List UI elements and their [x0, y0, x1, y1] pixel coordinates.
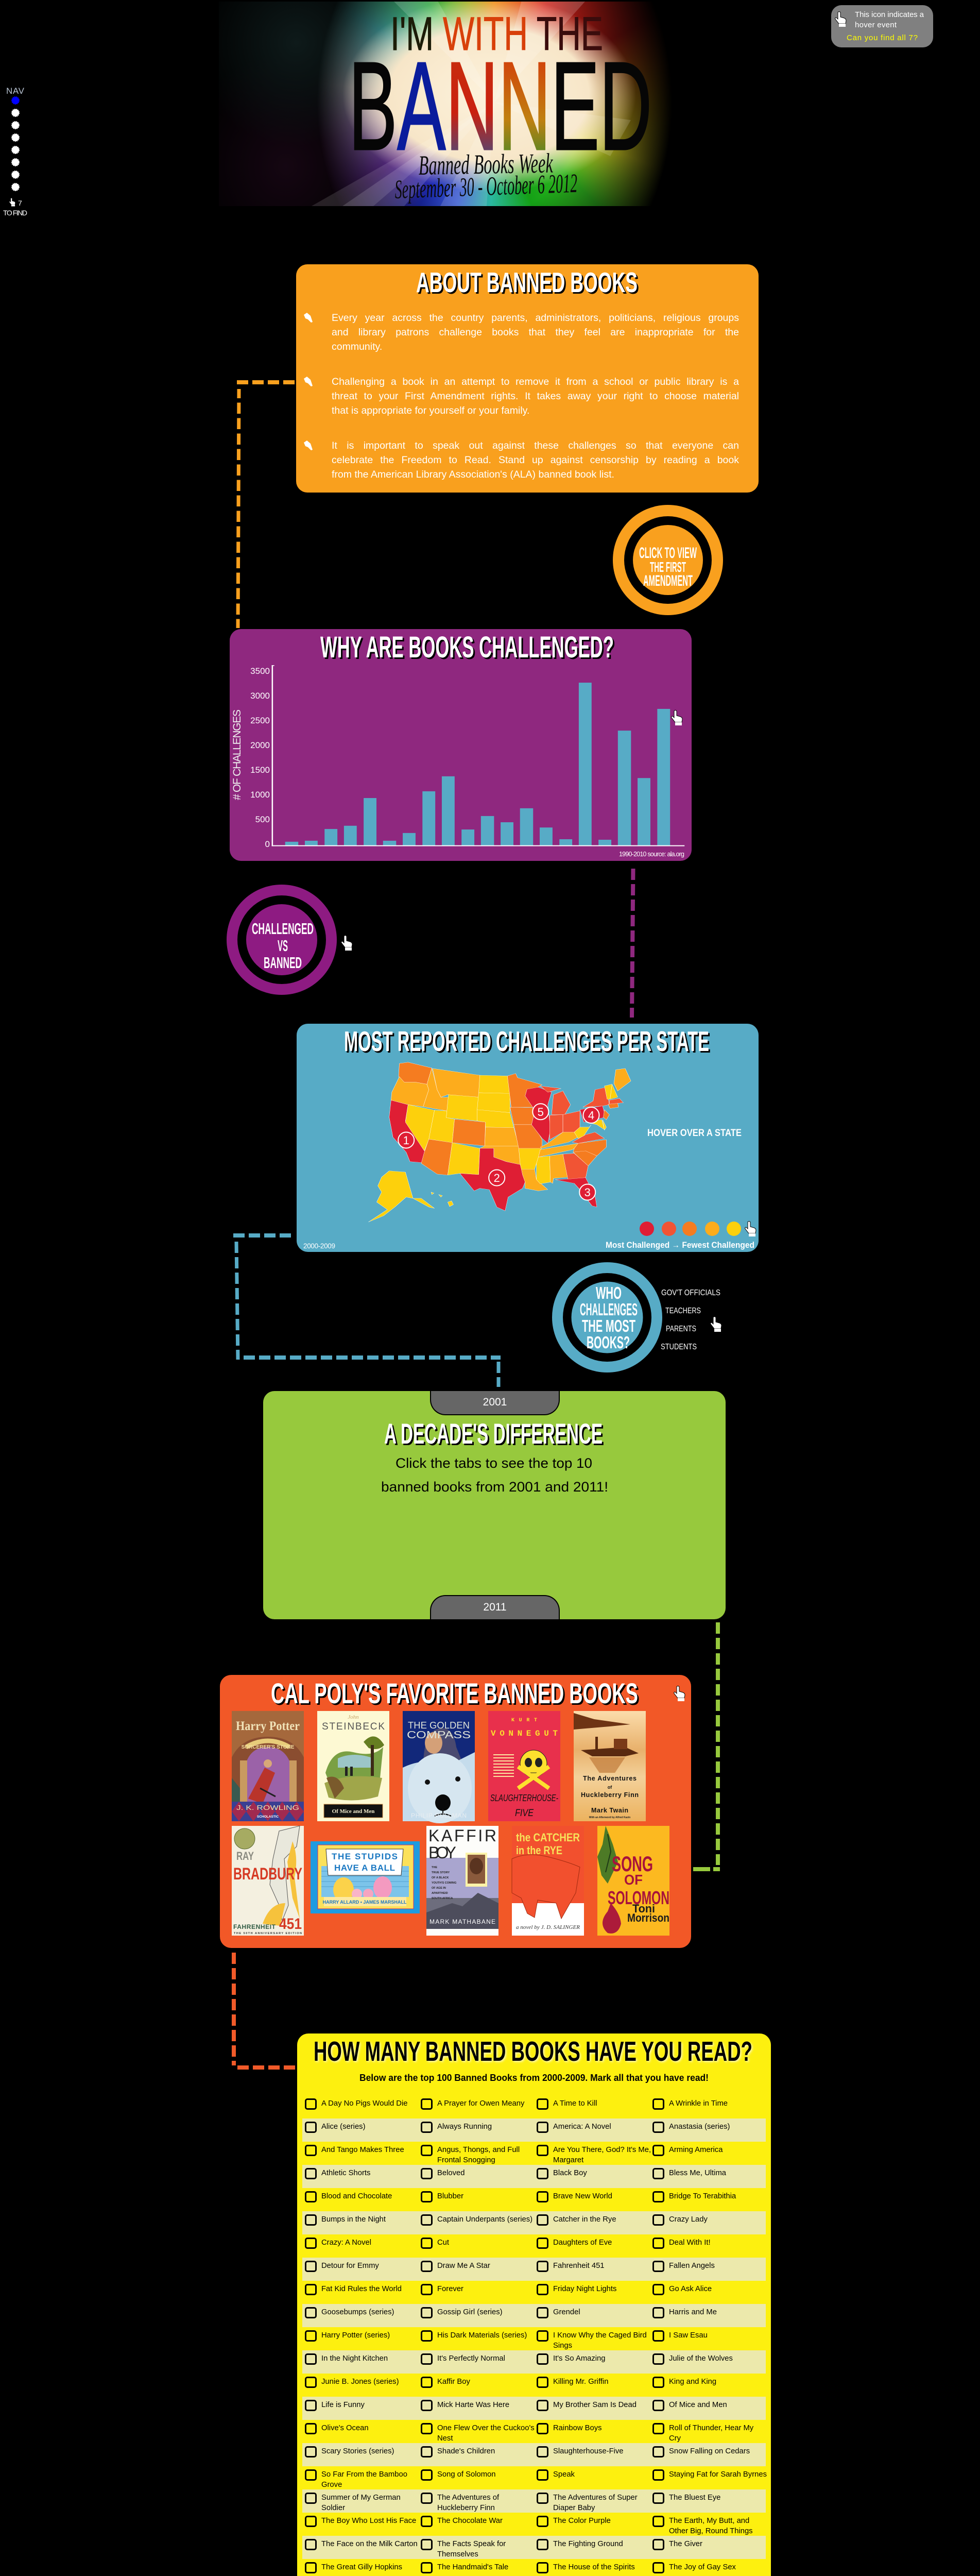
panel: challenges per state [297, 1024, 759, 1252]
connector: about to why [237, 382, 295, 628]
paragraph 1: and library patrons challenge books that they feel are inappropriate for the [332, 327, 739, 338]
checklist table: Nest [437, 2434, 453, 2443]
panel: cal poly's favorite banned books [220, 1675, 691, 1948]
instructions: banned books from 2001 and 2011! [381, 1479, 608, 1495]
book cover: fahrenheit 451: BRADBURY [233, 1865, 302, 1883]
map rank numbers: 2 [494, 1172, 500, 1184]
map rank numbers: 1 [403, 1134, 409, 1147]
connector: states to decade [233, 1235, 501, 1387]
book cover: song of solomon: Toni [632, 1902, 655, 1915]
hover event tooltip: Can you find all 7? [847, 33, 918, 42]
paragraph 1 [332, 312, 739, 352]
heading: HOW MANY BANNED BOOKS HAVE YOU READ? [314, 2036, 752, 2067]
us map [303, 1062, 756, 1250]
side navigation: 7 [18, 199, 22, 207]
paragraph 2: threat to your First Amendment rights. It takes away your right to choose material [332, 391, 739, 402]
book cover: slaughterhouse-five: KURT [511, 1718, 537, 1723]
book cover: kaffir boy: OF AGE IN [432, 1887, 446, 1890]
checklist table: I Know Why the Caged Bird [553, 2331, 647, 2340]
book cover: slaughterhouse-five: SLAUGHTERHOUSE- [490, 1793, 558, 1803]
map rank numbers: 5 [538, 1106, 544, 1118]
checklist table: Margaret [553, 2156, 583, 2164]
checklist table: The Handmaid's Tale [437, 2563, 508, 2571]
book cover: kaffir boy: OF A BLACK [432, 1876, 449, 1879]
y axis labels: 1500 [250, 765, 270, 775]
checklist table: I Saw Esau [669, 2331, 708, 2340]
checklist table: Olive's Ocean [321, 2424, 369, 2432]
checklist table: Shade's Children [437, 2447, 495, 2455]
checklist table: Slaughterhouse-Five [553, 2447, 624, 2455]
checklist table: It's So Amazing [553, 2354, 606, 2363]
y axis labels [250, 666, 270, 849]
checklist table: The Face on the Milk Carton [321, 2540, 418, 2548]
checklist table: My Brother Sam Is Dead [553, 2401, 637, 2409]
hover event tooltip [831, 5, 933, 47]
checklist table: Song of Solomon [437, 2470, 496, 2479]
circle: challenged vs banned: CHALLENGED [252, 920, 314, 938]
checklist table: A Day No Pigs Would Die [321, 2099, 408, 2108]
panel: about banned books [296, 264, 759, 493]
icon: hover count hand [9, 198, 15, 206]
checklist table: Killing Mr. Griffin [553, 2378, 608, 2386]
hero title: Banned Books Week [418, 147, 554, 181]
book cover: huckleberry finn: of [608, 1785, 612, 1790]
bar chart [231, 665, 685, 858]
paragraph 1: Every year across the country parents, administrators, politicians, religious groups [332, 312, 739, 324]
hero title: September 30 - October 6 2012 [394, 169, 578, 205]
book cover: harry potter: SORCERER'S STONE [242, 1744, 295, 1750]
checklist table: Alice (series) [321, 2123, 366, 2131]
checklist table: Themselves [437, 2550, 478, 2558]
side navigation [3, 86, 27, 217]
side navigation: TO FIND [3, 209, 27, 217]
checklist table: Fahrenheit 451 [553, 2262, 605, 2270]
challenger labels: TEACHERS [665, 1307, 701, 1315]
book cover: song of solomon [597, 1826, 669, 1936]
checklist table: Forever [437, 2285, 463, 2293]
panel: a decade's difference [263, 1391, 726, 1619]
connector: favorites to checklist [234, 1953, 295, 2067]
checklist table: Beloved [437, 2169, 465, 2177]
book cover: huckleberry finn: Huckleberry Finn [581, 1791, 639, 1799]
challenger labels: STUDENTS [661, 1343, 697, 1351]
book cover: huckleberry finn: Mark Twain [591, 1807, 628, 1814]
checklist table: Frontal Snogging [437, 2156, 495, 2164]
checklist table: A Wrinkle in Time [669, 2099, 728, 2108]
book cover: harry potter: J. K. ROWLING [236, 1804, 299, 1811]
paragraph 3: celebrate the Freedom to Read. Stand up against censorship by reading a book [332, 454, 739, 466]
checklist table: The Joy of Gay Sex [669, 2563, 736, 2571]
checklist table: Scary Stories (series) [321, 2447, 394, 2455]
checklist table: Arming America [669, 2146, 723, 2154]
y axis labels: 2500 [250, 716, 270, 725]
checklist table: Diaper Baby [553, 2504, 595, 2512]
book cover: kaffir boy: BOY [428, 1843, 456, 1862]
checklist table: Blubber [437, 2192, 463, 2200]
checklist table: Snow Falling on Cedars [669, 2447, 750, 2455]
book cover: kaffir boy [426, 1826, 498, 1936]
paragraph 3: from the American Library Association's (ALA) banned book list. [332, 469, 614, 480]
legend [606, 1222, 754, 1250]
checklist table: Deal With It! [669, 2239, 711, 2247]
book cover: the golden compass: COMPASS [407, 1730, 471, 1741]
book cover: kaffir boy: KAFFIR [428, 1826, 496, 1845]
checklist table: Catcher in the Rye [553, 2215, 616, 2224]
checklist table: Rainbow Boys [553, 2424, 602, 2432]
book cover: song of solomon: SOLOMON [608, 1887, 669, 1908]
checklist table: Crazy Lady [669, 2215, 708, 2224]
checklist table: Kaffir Boy [437, 2378, 470, 2386]
checklist table: Gossip Girl (series) [437, 2308, 503, 2316]
hover prompt: HOVER OVER A STATE [647, 1128, 742, 1139]
hero banner [222, 2, 668, 206]
checklist table: And Tango Makes Three [321, 2146, 404, 2154]
circle: who challenges the most books: THE MOST [582, 1316, 635, 1335]
map rank numbers: 3 [584, 1186, 591, 1199]
paragraph 1: community. [332, 341, 382, 352]
connector: why to states [632, 869, 633, 1018]
heading: A DECADE'S DIFFERENCE [384, 1417, 603, 1450]
circle: challenged vs banned: VS [278, 937, 288, 955]
checklist table: The Color Purple [553, 2517, 611, 2525]
icon: hover hand [341, 936, 352, 951]
book cover: fahrenheit 451: THE 50TH ANNIVERSARY EDITION [234, 1932, 302, 1935]
book cover: the golden compass: THE GOLDEN [408, 1720, 470, 1731]
book cover: kaffir boy: TRUE STORY [432, 1871, 450, 1874]
book cover: of mice and men: John [348, 1714, 359, 1720]
checklist table: Staying Fat for Sarah Byrnes [669, 2470, 767, 2479]
source note: 1990-2010 source: ala.org [619, 851, 684, 858]
map rank markers [398, 1104, 599, 1200]
checklist table: Bridge To Terabithia [669, 2192, 736, 2200]
book cover: fahrenheit 451: 451 [279, 1916, 302, 1933]
checklist table: Are You There, God? It's Me, [553, 2146, 651, 2154]
tab: 2011: 2011 [483, 1601, 507, 1613]
book cover: the golden compass: PHILIP PULLMAN [411, 1812, 467, 1819]
book cover: kaffir boy: THE [432, 1866, 437, 1869]
book cover: catcher in the rye: the CATCHER [516, 1831, 580, 1844]
hover event tooltip: hover event [855, 21, 897, 29]
circle: first amendment: CLICK TO VIEW [639, 545, 697, 562]
book cover: kaffir boy: SOUTH AFRICA [432, 1897, 453, 1900]
heading: WHY ARE BOOKS CHALLENGED? [320, 631, 614, 664]
challenger labels: PARENTS [666, 1325, 696, 1333]
nav dots [12, 97, 19, 191]
book cover: slaughterhouse-five [488, 1711, 560, 1821]
checklist table: Harris and Me [669, 2308, 717, 2316]
checklist table: The Facts Speak for [437, 2540, 506, 2548]
checklist table: Crazy: A Novel [321, 2239, 371, 2247]
checklist table: Cry [669, 2434, 681, 2443]
y axis labels: 0 [265, 839, 270, 849]
paragraph 2: that is appropriate for yourself or your family. [332, 405, 529, 416]
checklist table: So Far From the Bamboo [321, 2470, 407, 2479]
checklist table: Captain Underpants (series) [437, 2215, 532, 2224]
paragraph 3 [332, 440, 739, 480]
hero title [349, 8, 652, 205]
intro text: Below are the top 100 Banned Books from 2000-2009. Mark all that you have read! [359, 2073, 709, 2083]
checklist table: Black Boy [553, 2169, 587, 2177]
checklist table: The Chocolate War [437, 2517, 503, 2525]
checklist table: Sings [553, 2342, 572, 2350]
book cover: of mice and men: Of Mice and Men [332, 1808, 374, 1815]
checklist table: Harry Potter (series) [321, 2331, 390, 2340]
checklist table: Daughters of Eve [553, 2239, 612, 2247]
panel: how many banned books have you read [297, 2033, 771, 2576]
checklist table: The Earth, My Butt, and [669, 2517, 749, 2525]
side navigation: NAV [6, 86, 25, 96]
book cover: harry potter [232, 1711, 304, 1821]
book cover: harry potter: SCHOLASTIC [257, 1815, 279, 1819]
checklist table: Speak [553, 2470, 575, 2479]
book cover: the golden compass [403, 1711, 475, 1823]
checklist table: Detour for Emmy [321, 2262, 379, 2270]
icon: hover hand [711, 1317, 721, 1332]
panel: why are books challenged [230, 629, 692, 861]
book cover: of mice and men [317, 1711, 389, 1821]
paragraph 3: It is important to speak out against these challenges so that everyone can [332, 440, 739, 451]
checklist table: Life is Funny [321, 2401, 365, 2409]
book cover: fahrenheit 451: RAY [236, 1850, 254, 1862]
circle: first amendment: THE FIRST [650, 559, 686, 575]
bullet icons [304, 313, 313, 450]
closing call to action [297, 2033, 771, 2576]
book cover: slaughterhouse-five: FIVE [515, 1808, 534, 1819]
checklist table: The Great Gilly Hopkins [321, 2563, 402, 2571]
instructions [381, 1455, 608, 1495]
checklist table: The Boy Who Lost His Face [321, 2517, 416, 2525]
book cover: catcher in the rye [512, 1831, 584, 1936]
book cover: huckleberry finn [574, 1711, 646, 1821]
circle: who challenges the most books: BOOKS? [587, 1333, 630, 1352]
icon: hover hand [674, 1686, 685, 1701]
challenger labels [661, 1289, 720, 1351]
book cover: song of solomon: Morrison [627, 1911, 669, 1924]
checklist table: One Flew Over the Cuckoo's [437, 2424, 535, 2432]
checklist table: Summer of My German [321, 2494, 401, 2502]
book cover: kaffir boy: YOUTH'S COMING [432, 1882, 456, 1885]
checklist table: Other Big, Round Things [669, 2527, 753, 2535]
checklist table: Athletic Shorts [321, 2169, 370, 2177]
checklist table: Brave New World [553, 2192, 612, 2200]
checklist table: Grendel [553, 2308, 580, 2316]
y axis labels: 3500 [250, 666, 270, 676]
checklist table: Fat Kid Rules the World [321, 2285, 402, 2293]
y axis labels: 3000 [250, 691, 270, 701]
book cover: fahrenheit 451 [232, 1825, 304, 1936]
checklist table: Bless Me, Ultima [669, 2169, 726, 2177]
checklist table: In the Night Kitchen [321, 2354, 388, 2363]
heading: ABOUT BANNED BOOKS [416, 266, 638, 298]
map rank numbers: 4 [588, 1109, 594, 1122]
paragraph 2: Challenging a book in an attempt to remove it from a school or public library is a [332, 376, 739, 387]
book cover: huckleberry finn: The Adventures [583, 1775, 637, 1782]
book cover: slaughterhouse-five: VONNEGUT [491, 1729, 558, 1738]
checklist table: Junie B. Jones (series) [321, 2378, 399, 2386]
y axis labels: 1000 [250, 790, 270, 800]
book cover: the stupids have a ball: HARRY ALLARD • JAMES MARSHALL [323, 1900, 407, 1905]
checklist table: A Prayer for Owen Meany [437, 2099, 524, 2108]
circle: first amendment [613, 505, 723, 615]
tab: 2001: 2001 [483, 1396, 507, 1408]
checklist table: Friday Night Lights [553, 2285, 616, 2293]
book cover: the stupids have a ball [311, 1841, 420, 1913]
checklist table: The Adventures of Super [553, 2494, 638, 2502]
checklist table: Soldier [321, 2504, 345, 2512]
checklist table: The Fighting Ground [553, 2540, 623, 2548]
circle: first amendment: AMENDMENT [643, 572, 693, 589]
checklist table: Mick Harte Was Here [437, 2401, 509, 2409]
heading: CAL POLY'S FAVORITE BANNED BOOKS [271, 1677, 638, 1709]
checklist table: Grove [321, 2481, 342, 2489]
hero title: BANNED [349, 36, 652, 176]
legend: Most Challenged → Fewest Challenged [606, 1240, 754, 1250]
connector: decade to favorites [693, 1622, 720, 1869]
checklist table: Julie of the Wolves [669, 2354, 733, 2363]
book cover: kaffir boy: APARTHEID [432, 1892, 448, 1895]
icon: hover hand [745, 1222, 756, 1236]
challenger labels: GOV'T OFFICIALS [661, 1289, 720, 1297]
book cover: catcher in the rye: a novel by J. D. SALINGER [516, 1924, 580, 1930]
circle: who challenges the most books: CHALLENGES [580, 1300, 638, 1319]
circle: who challenges the most books: WHO [596, 1283, 622, 1302]
checklist table: Go Ask Alice [669, 2285, 712, 2293]
tab: 2001 [430, 1391, 560, 1415]
circle: challenged vs banned [227, 885, 352, 995]
checklist table: Bumps in the Night [321, 2215, 386, 2224]
heading: MOST REPORTED CHALLENGES PER STATE [344, 1025, 709, 1057]
icon: hover hand [672, 710, 682, 725]
instructions: Click the tabs to see the top 10 [396, 1455, 592, 1471]
map rank numbers [403, 1106, 594, 1199]
circle: who challenges the most books [552, 1262, 721, 1372]
checklist table: Draw Me A Star [437, 2262, 490, 2270]
book cover: song of solomon: OF [624, 1872, 643, 1888]
checklist table: His Dark Materials (series) [437, 2331, 527, 2340]
checklist table: The Bluest Eye [669, 2494, 720, 2502]
date range: 2000-2009 [303, 1242, 335, 1250]
book cover: the stupids have a ball: THE STUPIDS [332, 1852, 398, 1861]
book cover: the stupids have a ball: HAVE A BALL [334, 1863, 395, 1873]
checklist table: Anastasia (series) [669, 2123, 730, 2131]
book cover: song of solomon: SONG [612, 1852, 653, 1876]
checklist table: King and King [669, 2378, 716, 2386]
y axis title: # OF CHALLENGES [231, 709, 243, 800]
y axis labels: 2000 [250, 740, 270, 750]
circle: challenged vs banned: BANNED [264, 954, 302, 972]
checklist table: Blood and Chocolate [321, 2192, 392, 2200]
checklist table: Huckleberry Finn [437, 2504, 495, 2512]
checklist table: The House of the Spirits [553, 2563, 635, 2571]
book cover: fahrenheit 451: FAHRENHEIT [233, 1923, 276, 1930]
checklist table: Roll of Thunder, Hear My [669, 2424, 753, 2432]
checklist table: Of Mice and Men [669, 2401, 727, 2409]
checklist table: Angus, Thongs, and Full [437, 2146, 520, 2154]
checklist table: Goosebumps (series) [321, 2308, 394, 2316]
book cover: catcher in the rye: in the RYE [516, 1844, 562, 1857]
book cover: kaffir boy: MARK MATHABANE [429, 1918, 495, 1925]
book cover: huckleberry finn: With an Afterword by Alfred Kazin [589, 1816, 630, 1819]
paragraph 2 [332, 376, 739, 416]
checklist table: The Giver [669, 2540, 702, 2548]
hover event tooltip: This icon indicates a [855, 10, 924, 19]
checklist table: It's Perfectly Normal [437, 2354, 505, 2363]
checklist table: Always Running [437, 2123, 492, 2131]
checklist table: Fallen Angels [669, 2262, 715, 2270]
checklist table: The Adventures of [437, 2494, 499, 2502]
y axis labels: 500 [255, 815, 270, 824]
checklist table: Cut [437, 2239, 449, 2247]
checklist table: A Time to Kill [553, 2099, 597, 2108]
checklist table: America: A Novel [553, 2123, 611, 2131]
checklist table [302, 2098, 767, 2573]
hero title: I'M WITH THE [390, 8, 603, 60]
tab: 2011 [430, 1595, 560, 1619]
book cover: of mice and men: STEINBECK [322, 1721, 385, 1732]
book cover: harry potter: Harry Potter [236, 1719, 300, 1733]
icon: hover hand [835, 12, 846, 27]
